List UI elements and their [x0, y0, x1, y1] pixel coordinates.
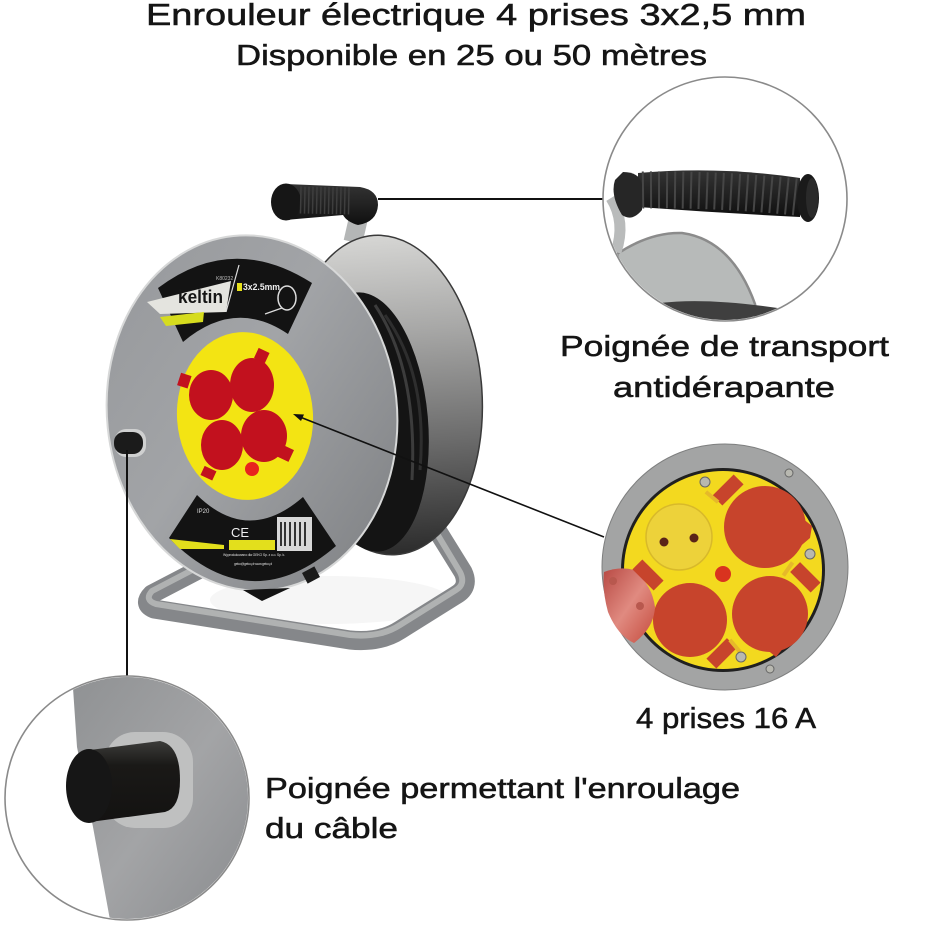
metal stand — [147, 522, 465, 641]
bottom black label: Wyprodukowano dla GEKO Sp. z o.o. Sp. k. — [223, 553, 285, 557]
bottom black label: IP20 — [197, 509, 210, 515]
arrow: to sockets — [293, 414, 604, 537]
rear flange — [277, 229, 493, 561]
detail: knob end cap — [66, 749, 106, 823]
detail circle: carry handle — [603, 77, 847, 335]
front flange — [89, 221, 415, 605]
wound cable — [297, 287, 439, 557]
top black label: K80232 — [216, 276, 233, 282]
caption: carry handle: Poignée de transport — [560, 331, 889, 363]
cap: top right — [712, 474, 812, 568]
yellow plate — [624, 471, 822, 669]
detail: flange surface — [73, 677, 248, 919]
detail: ribbed grip — [614, 170, 819, 222]
subtitle: Disponible en 25 ou 50 mètres — [236, 40, 707, 72]
cap: bottom left — [653, 583, 737, 669]
detail: steel post — [611, 198, 620, 252]
caption: carry handle: antidérapante — [613, 372, 835, 404]
caption: winding knob — [265, 773, 740, 845]
steel ring — [602, 444, 848, 690]
indicator light — [715, 566, 731, 582]
leader line: winding knob — [126, 450, 128, 678]
open socket — [646, 504, 712, 570]
bottom black label — [169, 495, 336, 581]
caption: winding knob: du câble — [265, 813, 398, 845]
yellow socket plate — [171, 327, 319, 505]
hinge clips — [705, 490, 794, 653]
floor shadow — [210, 576, 450, 624]
carry handle post — [353, 220, 358, 242]
top black label — [147, 259, 312, 342]
caption: sockets: 4 prises 16 A — [636, 703, 817, 735]
detail: coiled cable — [662, 301, 778, 320]
bottom black label: geko@geko.pl www.geko.pl — [234, 562, 272, 566]
detail circle: winding knob — [5, 670, 260, 930]
cap: bottom right — [732, 562, 821, 657]
top black label: 3x2.5mm — [243, 282, 280, 293]
detail: rear flange — [616, 232, 758, 320]
main handle grip — [271, 184, 378, 225]
caption: carry handle — [560, 331, 889, 404]
detail: silver collar — [105, 732, 193, 828]
detail: knob body — [90, 741, 180, 822]
product photo: cable reel — [89, 184, 493, 641]
detail circle: four sockets — [602, 444, 848, 690]
top black label: keltin — [178, 287, 223, 307]
dark seal — [621, 468, 825, 672]
side winding knob — [114, 429, 146, 457]
leader line: carry handle — [378, 198, 604, 200]
screws — [700, 469, 815, 673]
open hinged cap — [604, 559, 664, 643]
bottom foot — [243, 566, 320, 601]
red socket caps — [177, 348, 294, 480]
bottom black label: CE — [231, 525, 249, 540]
caption: winding knob: Poignée permettant l'enroulage — [265, 773, 740, 805]
